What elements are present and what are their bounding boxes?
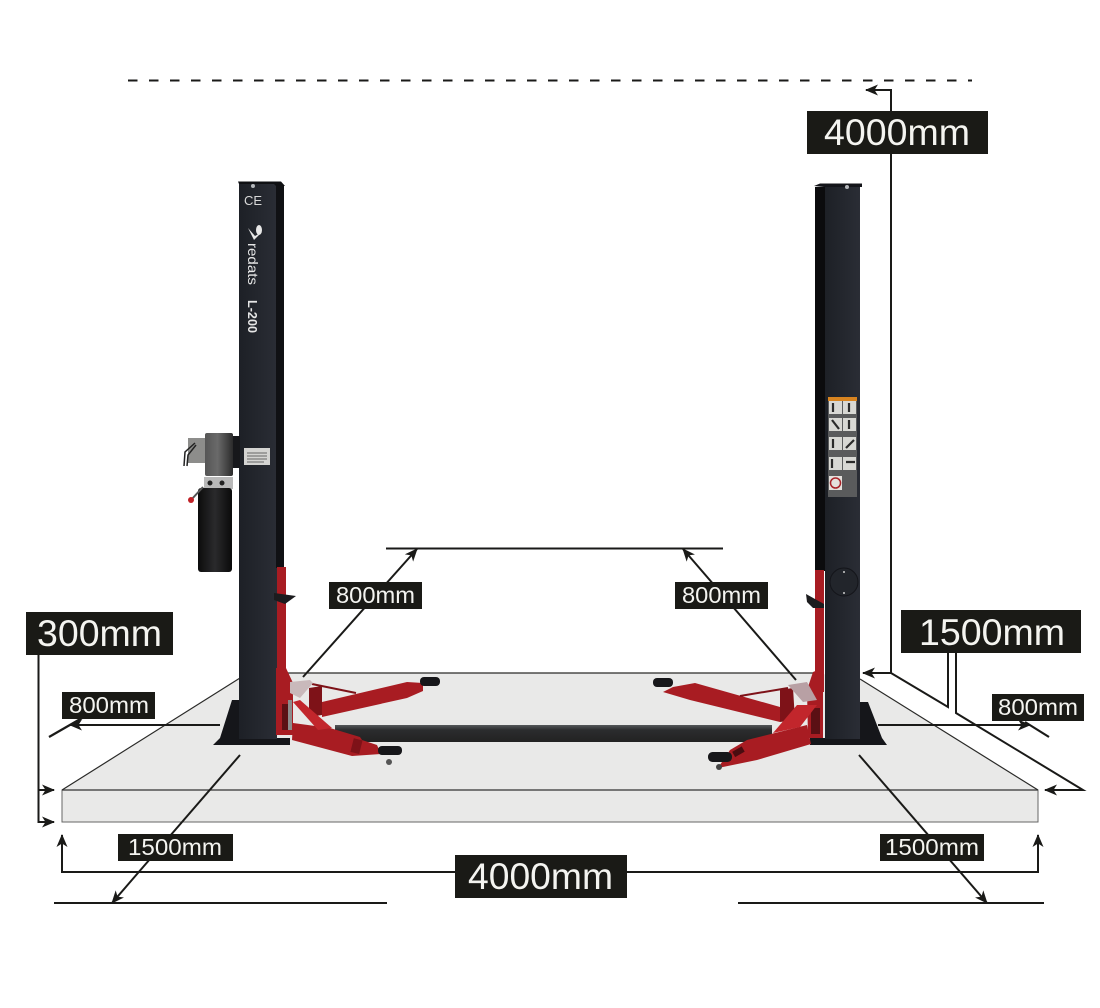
front left dimension 1500mm: 1500mm: [128, 834, 222, 860]
front right dimension 1500mm: [738, 755, 1044, 903]
middle left dimension 800mm: 800mm: [336, 582, 415, 608]
carriage bolt: [288, 700, 292, 730]
height dimension 4000mm: [807, 90, 988, 673]
hydraulic power unit: [184, 433, 240, 572]
slab thickness dimension 300mm: 300mm: [37, 613, 162, 654]
front right dimension 1500mm: 1500mm: [885, 834, 979, 860]
safety sticker panel: [828, 397, 857, 497]
floor cross beam: [335, 725, 772, 742]
concrete floor slab: [62, 673, 1038, 822]
middle right dimension 800mm: 800mm: [682, 582, 761, 608]
left column body: [239, 183, 277, 739]
front left dimension 1500mm: [54, 755, 387, 903]
access cover: [830, 568, 858, 596]
spec plate: [244, 448, 270, 465]
lifting plate: [290, 680, 313, 698]
right arm assembly: [653, 570, 824, 770]
right lift column: [810, 184, 887, 745]
rear arm: [322, 682, 423, 717]
right column body: [825, 185, 860, 739]
lift depth reference line: [386, 548, 723, 550]
left lift column: L-200: [245, 300, 260, 333]
front arm: [718, 725, 811, 768]
middle left dimension 800mm: [303, 549, 422, 677]
middle right dimension 800mm: [675, 549, 796, 680]
right base plate: [810, 702, 887, 745]
left column branding: CE: [244, 193, 262, 208]
right side dimension 800mm: 800mm: [998, 694, 1078, 720]
slab width dimension 4000mm: [62, 835, 1038, 898]
left lift column: [213, 182, 290, 745]
rear clearance dimension 1500mm: 1500mm: [919, 612, 1065, 653]
left arm assembly: [274, 567, 440, 765]
slab thickness dimension 300mm: [26, 612, 173, 822]
rear arm: [663, 683, 780, 722]
slab width dimension 4000mm: 4000mm: [468, 856, 613, 897]
left lift column: redats: [245, 243, 261, 285]
lifting plate: [788, 682, 817, 702]
rear clearance dimension 1500mm: [891, 610, 1083, 790]
ceiling clearance dashed line: [128, 80, 972, 82]
left side dimension 800mm: 800mm: [69, 692, 149, 718]
front arm: [292, 723, 381, 756]
right side dimension 800mm: [878, 694, 1084, 737]
left side dimension 800mm: [49, 692, 220, 737]
left base plate: [213, 700, 290, 745]
height dimension 4000mm: 4000mm: [824, 112, 970, 153]
